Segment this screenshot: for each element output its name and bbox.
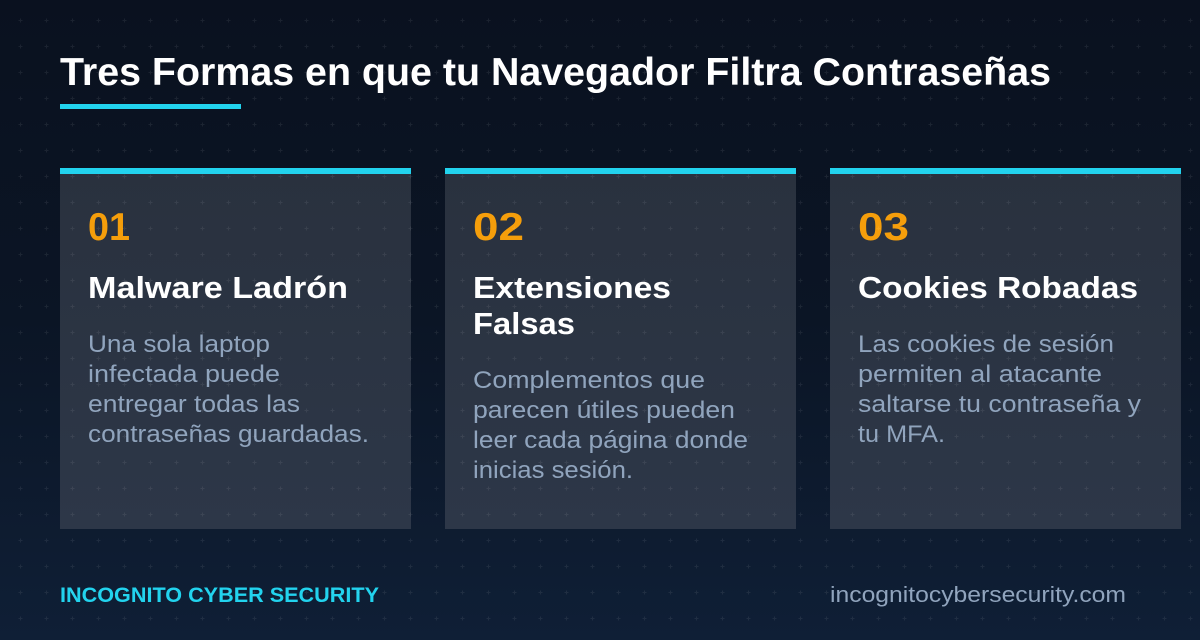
card top accent <box>60 168 411 174</box>
number 03: 03 <box>858 206 909 249</box>
heading: Malware Ladrón <box>88 270 348 305</box>
title: Tres Formas en que tu Navegador Filtra Contraseñas <box>60 51 1051 94</box>
body text: Complementos que <box>473 367 705 394</box>
body text: inicias sesión. <box>473 457 633 484</box>
body text <box>473 367 748 484</box>
number 02: 02 <box>473 206 524 249</box>
body text <box>858 331 1142 448</box>
number 01: 01 <box>88 206 130 249</box>
body text: Las cookies de sesión <box>858 331 1114 358</box>
panel: 02 Extensiones Falsas <box>445 168 796 529</box>
heading <box>473 270 671 341</box>
body text: saltarse tu contraseña y <box>858 391 1142 418</box>
panel: 03 Cookies Robadas <box>830 168 1181 529</box>
card top accent <box>830 168 1181 174</box>
heading: Cookies Robadas <box>858 270 1138 305</box>
body text: contraseñas guardadas. <box>88 421 369 448</box>
footer brand: INCOGNITO CYBER SECURITY <box>60 583 379 607</box>
card background <box>445 168 796 529</box>
heading: Extensiones <box>473 270 671 305</box>
body text: parecen útiles pueden <box>473 397 735 424</box>
card background <box>60 168 411 529</box>
body text: leer cada página donde <box>473 427 748 454</box>
body text: entregar todas las <box>88 391 300 418</box>
body text: Una sola laptop <box>88 331 270 358</box>
title underline <box>60 104 241 109</box>
body text: permiten al atacante <box>858 361 1102 388</box>
card background <box>830 168 1181 529</box>
footer website: incognitocybersecurity.com <box>830 582 1126 607</box>
card top accent <box>445 168 796 174</box>
body text: infectada puede <box>88 361 280 388</box>
body text: tu MFA. <box>858 421 945 448</box>
body text <box>88 331 369 448</box>
heading: Falsas <box>473 306 575 341</box>
panel: 01 Malware Ladrón <box>60 168 411 529</box>
